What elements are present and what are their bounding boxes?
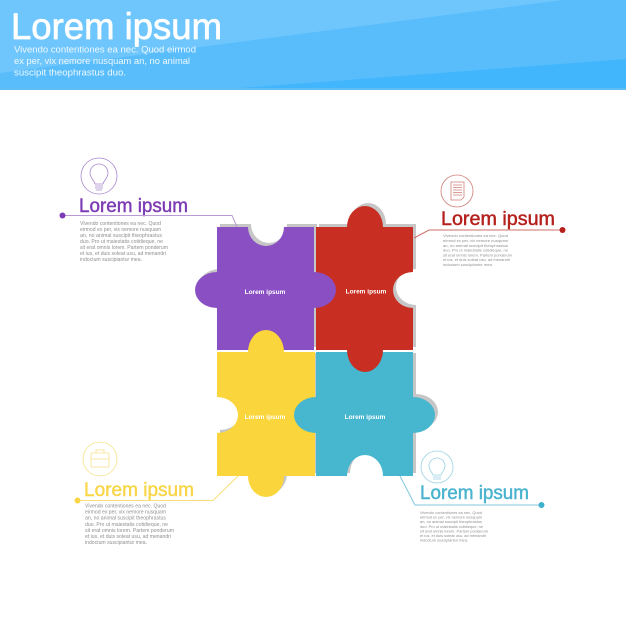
piece labels: Lorem ipsum (245, 289, 286, 296)
body text: Vivendo contentiones ea nec. Quod (80, 221, 161, 227)
body text: et ius, et duis soleat usu, ad menandri (443, 257, 510, 262)
body text: eirmod ex per, vix nemore nusquam (85, 510, 166, 516)
heading: Lorem ipsum (84, 480, 194, 501)
piece: blue left tab (294, 397, 316, 433)
icon: light bulb (421, 451, 453, 483)
body text: an, no animal suscipit theophrastus (85, 516, 167, 522)
callout: yellow (74, 442, 238, 546)
heading: Lorem ipsum (441, 209, 555, 230)
piece: blue (294, 352, 435, 476)
body text: an, no animal suscipit theophrastus (443, 243, 508, 248)
body text: an, no animal suscipit theophrastus (420, 519, 482, 524)
body text: indoctum suscipiantur mea. (80, 257, 142, 263)
body text: duo. Pro ut maiestatis cotidieque, ne (85, 522, 168, 528)
connector (400, 476, 541, 505)
piece: red (316, 206, 413, 372)
piece labels: Lorem ipsum (346, 288, 387, 296)
body text: indoctum suscipiantur mea. (420, 538, 468, 543)
body text: sit erat omnis lorem. Partem ponderum (85, 528, 174, 534)
connector (62, 216, 237, 227)
body text: duo. Pro ut maiestatis cotidieque, ne (420, 524, 484, 529)
body text: Vivendo contentiones ea nec. Quod (420, 510, 482, 515)
body text: duo. Pro ut maiestatis cotidieque, ne (443, 248, 509, 253)
piece labels: Lorem ipsum (345, 414, 386, 421)
body text: indoctum suscipiantur mea. (443, 262, 493, 267)
callout: purple (60, 158, 237, 263)
body text (420, 510, 489, 543)
body text: et ius, et duis soleat usu, ad menandri (420, 533, 486, 538)
piece labels: Lorem ipsum (245, 414, 286, 421)
body text (85, 504, 174, 546)
body text: sit erat omnis lorem. Partem ponderum (80, 245, 168, 251)
body text: et ius, et duis soleat usu, ad menandri (85, 534, 171, 540)
body text: eirmod ex per, vix nemore nusquam (443, 238, 509, 243)
header description (14, 44, 196, 78)
title: Lorem ipsum (11, 6, 222, 47)
header banner (0, 0, 626, 90)
body text: Vivendo contentiones ea nec. Quod (85, 504, 166, 510)
header description: suscipit theophrastus duo. (14, 68, 126, 78)
body text: eirmod ex per, vix nemore nusquam (420, 515, 483, 520)
body text (80, 221, 168, 263)
callout: red (414, 175, 566, 267)
puzzle diagram (195, 206, 435, 497)
callout: blue (400, 451, 544, 543)
icon: document (441, 175, 473, 207)
icon: light bulb (81, 158, 117, 194)
body text: et ius, et duis soleat usu, ad menandri (80, 251, 166, 257)
header description: Vivendo contentiones ea nec. Quod eirmod (14, 44, 196, 56)
body text: indoctum suscipiantur mea. (85, 540, 147, 546)
connector (414, 230, 562, 238)
piece: purple (195, 227, 336, 350)
heading: Lorem ipsum (420, 483, 529, 504)
heading: Lorem ipsum (79, 196, 188, 217)
puzzle shadow (198, 203, 438, 494)
piece: yellow (217, 330, 315, 497)
body text: eirmod ex per, vix nemore nusquam (80, 227, 161, 233)
body text: Vivendo contentiones ea nec. Quod (443, 233, 508, 238)
body text: sit erat omnis lorem. Partem ponderum (420, 528, 489, 533)
icon: briefcase (83, 442, 117, 476)
body text: sit erat omnis lorem. Partem ponderum (443, 252, 513, 257)
body text (443, 233, 513, 267)
connector (77, 476, 238, 500)
piece labels (245, 288, 387, 421)
body text: an, no animal suscipit theophrastus (80, 233, 163, 239)
body text: duo. Pro ut maiestatis cotidieque, ne (80, 239, 163, 245)
header description: ex per, vix nemore nusquam an, no animal (14, 56, 190, 67)
